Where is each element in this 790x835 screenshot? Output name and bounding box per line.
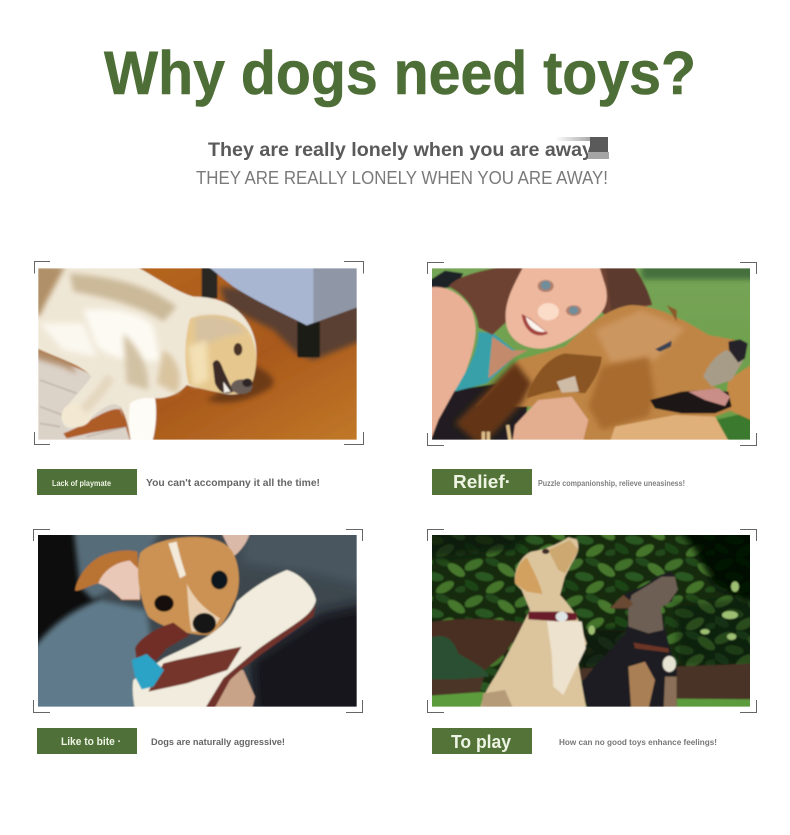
subtitle: uppercase line: THEY ARE REALLY LONELY WHEN YOU ARE AWAY! (196, 168, 608, 188)
description: How can no good toys enhance feelings! (559, 737, 717, 747)
panel: to play (425, 527, 758, 754)
photo corner brackets (428, 530, 756, 712)
panel: like to bite (30, 527, 367, 754)
icon: small dark laptop artifact (555, 137, 609, 159)
label bar (37, 728, 137, 754)
label text: Lack of playmate (52, 479, 111, 488)
description: Puzzle companionship, relieve uneasiness! (538, 479, 685, 488)
panel: lack of playmate (30, 260, 363, 495)
subtitle: bold line: They are really lonely when you are away (208, 140, 593, 161)
label bar (37, 469, 137, 495)
photo: two dogs sitting and looking up (432, 535, 750, 707)
label bar (432, 728, 532, 754)
label text: Relief· (453, 472, 511, 492)
photo: golden retriever lying on floor (38, 268, 357, 440)
photo: smiling girl hugging dog (432, 268, 750, 440)
description: Dogs are naturally aggressive! (151, 737, 285, 748)
photo corner brackets (34, 530, 362, 712)
description: You can't accompany it all the time! (146, 478, 320, 489)
label bar (432, 469, 532, 495)
panel: relief (425, 260, 758, 495)
photo: chihuahua puppy biting slipper (38, 535, 357, 707)
photo corner brackets (34, 262, 364, 444)
photo corner brackets (428, 262, 756, 446)
label text: To play (451, 732, 511, 752)
title: Why dogs need toys? (104, 39, 696, 107)
label text: Like to bite · (61, 736, 121, 748)
